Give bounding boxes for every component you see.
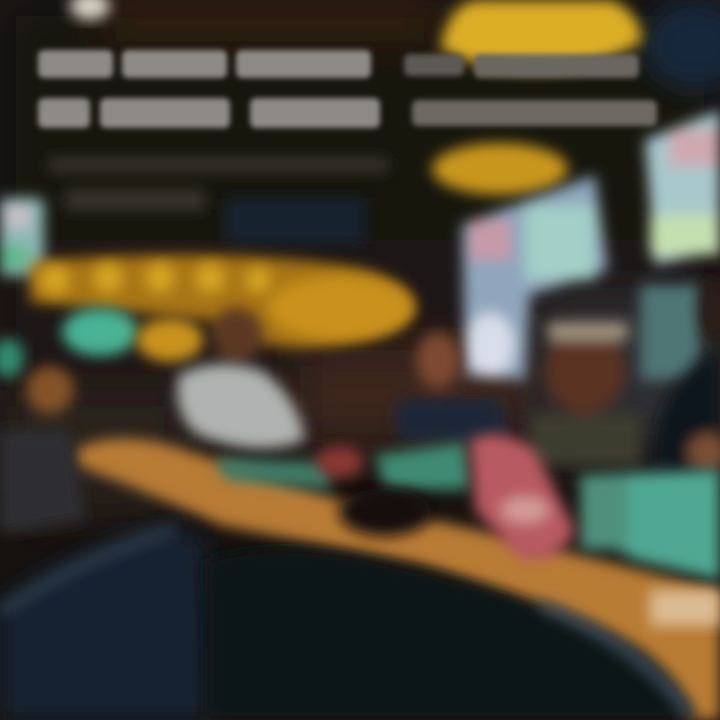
light napkin: table right bbox=[650, 590, 720, 626]
pink stack: drink bbox=[470, 434, 575, 561]
person: right bbox=[530, 322, 640, 465]
person: centre bbox=[395, 332, 505, 442]
foreground: dark shoulder right bbox=[205, 549, 695, 720]
teal mat: centre bbox=[375, 442, 470, 490]
foreground: left rim light bbox=[0, 530, 175, 612]
sign bulbs bbox=[40, 263, 271, 295]
teal glow: edge bbox=[0, 338, 24, 378]
dark object: on table bbox=[339, 488, 431, 536]
person: left seated bbox=[0, 366, 85, 535]
lamp: large yellow sign bbox=[30, 255, 415, 348]
title: blurred headline bbox=[38, 50, 657, 128]
screen: centre right bbox=[462, 175, 608, 380]
ceiling light: top white bbox=[70, 0, 110, 20]
table: wooden bbox=[75, 439, 720, 720]
foreground: dark shoulder left bbox=[0, 525, 215, 720]
lamp: middle yellow bbox=[432, 143, 568, 195]
foreground: rim light bbox=[540, 605, 690, 715]
background: restaurant interior bbox=[0, 0, 720, 510]
screen: far right bbox=[640, 110, 720, 380]
person: white shirt bbox=[177, 307, 364, 490]
person: far right dark bbox=[655, 278, 720, 475]
lamp: small yellow bbox=[136, 318, 204, 362]
dark navy corner: top right bbox=[643, 0, 720, 90]
subtitle: blurred text block bbox=[48, 158, 388, 244]
screen: left bbox=[0, 198, 44, 276]
lamp: top yellow bbox=[440, 0, 642, 70]
teal box: right bbox=[580, 470, 720, 580]
teal glow: left bbox=[62, 308, 138, 356]
